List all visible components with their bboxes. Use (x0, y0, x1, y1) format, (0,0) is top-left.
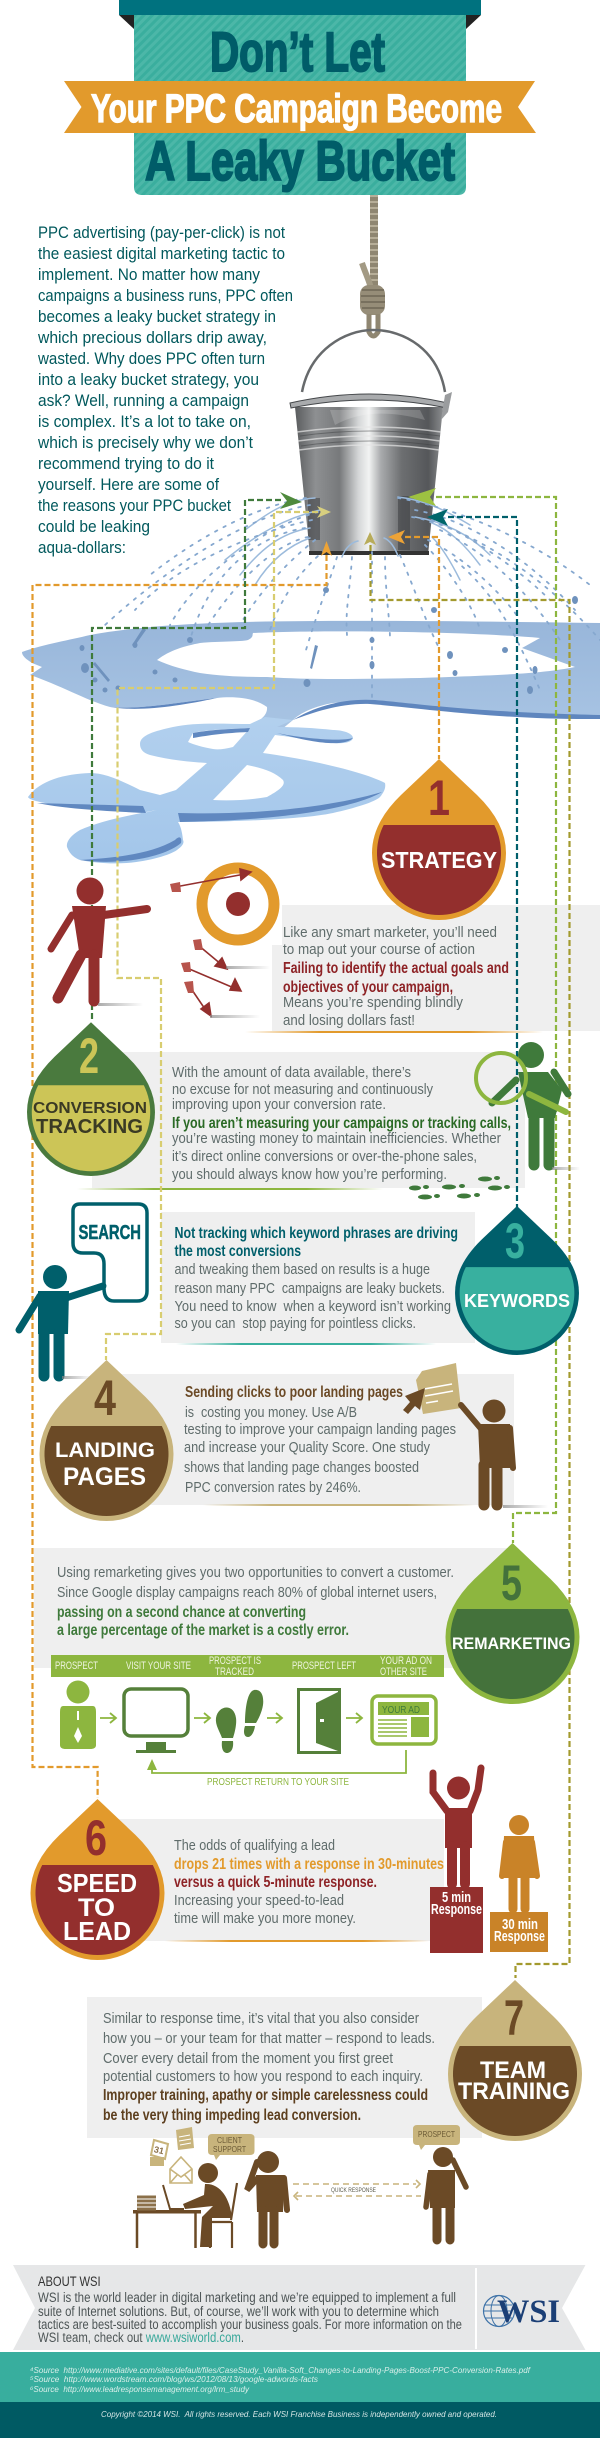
about WSI banner: ABOUT WSI (38, 2273, 101, 2289)
WSI logo: WSI (497, 2294, 560, 2330)
panel 6 text: speed to lead: drops 21 times with a response in 30-minutes (174, 1856, 444, 1873)
panel 4 text: landing pages: Sending clicks to poor landing pages (185, 1384, 403, 1401)
panel 1 text: strategy: Means you’re spending blindly (283, 995, 464, 1011)
drop 4: landing pages: PAGES (63, 1463, 146, 1491)
prospect on phone: PROSPECT (418, 2129, 455, 2139)
remarketing flow icons: PROSPECT RETURN TO YOUR SITE (207, 1777, 349, 1788)
panel 1 text: strategy: to map out your course of action (283, 942, 475, 958)
drop 2: conversion tracking (27, 1022, 155, 1176)
puddle with dollar sign (22, 621, 600, 863)
remarketing step band: VISIT YOUR SITE (126, 1660, 191, 1672)
panel 4 text: landing pages: testing to improve your campaign landing pages (184, 1422, 456, 1438)
panel 2 text: conversion tracking: no excuse for not measuring and continuously (172, 1082, 434, 1098)
drop 3: keywords: 3 (505, 1213, 525, 1269)
title banner (64, 0, 536, 195)
about WSI banner: tactics are best-suited to accomplish your business goals. For more information on the (38, 2317, 462, 2332)
drop 2: conversion tracking: 2 (79, 1028, 99, 1084)
panel 7 text: team training: how you – or your team for that matter – respond to leads. (103, 2031, 435, 2047)
drop 7: team training: 7 (504, 1990, 524, 2046)
panel 7 text: team training (103, 2011, 435, 2124)
quick response arrows (293, 2180, 421, 2200)
sources footer (0, 2352, 600, 2402)
panel 1 text: strategy: Failing to identify the actual goals and (283, 960, 509, 977)
panel 1 text: strategy (283, 925, 509, 1029)
panel 5 text: remarketing: Using remarketing gives you two opportunities to convert a customer. (57, 1565, 454, 1581)
drop 6: speed to lead: SPEED (57, 1868, 137, 1898)
icon: podium figures 5 min and 30 min: Response (431, 1901, 482, 1918)
leak arrowheads (280, 488, 448, 556)
panel 2 text: conversion tracking: If you aren’t measuring your campaigns or tracking calls, (172, 1115, 511, 1132)
copyright footer: Copyright ©2014 WSI. All rights reserved. Each WSI Franchise Business is independently owned and operated. (101, 2409, 497, 2419)
panel 4 text: landing pages: PPC conversion rates by 246%. (185, 1480, 361, 1496)
drop 2: conversion tracking: TRACKING (36, 1116, 143, 1138)
panel 5 text: remarketing (57, 1565, 454, 1639)
panel 1 text: strategy: objectives of your campaign, (283, 979, 453, 996)
panel 7 text: team training: Improper training, apathy or simple carelessness could (103, 2087, 428, 2104)
about WSI banner: suite of Internet solutions. But, of course, we’ll work with you to determine which (38, 2304, 439, 2319)
client support illustration: 31 (153, 2144, 165, 2156)
sources footer: ⁵Source http://www.wordstream.com/blog/ws/2012/08/13/google-adwords-facts (30, 2375, 318, 2384)
remarketing step band (51, 1655, 444, 1678)
drop 1: strategy: STRATEGY (381, 847, 497, 873)
intro paragraph: which precious dollars drip away, (37, 328, 267, 347)
drop 6: speed to lead (30, 1799, 164, 1960)
remarketing step band: TRACKED (215, 1666, 254, 1678)
drop 7: team training: TEAM (480, 2057, 546, 2084)
remarketing step band: PROSPECT (55, 1660, 98, 1672)
drop 1: strategy (372, 759, 506, 920)
remarketing flow icons: YOUR AD (382, 1705, 420, 1716)
quick response arrows: QUICK RESPONSE (331, 2188, 376, 2194)
panel 4 text: landing pages: shows that landing page changes boosted (184, 1460, 419, 1476)
drop 5: remarketing (446, 1543, 580, 1704)
panel 2 text: conversion tracking: With the amount of data available, there’s (172, 1065, 411, 1081)
panel 4 text: landing pages: is costing you money. Use A/B (185, 1405, 357, 1421)
about WSI banner: WSI is the world leader in digital marketing and we’re equipped to implement a full (38, 2290, 456, 2305)
drop 4: landing pages (40, 1360, 174, 1521)
drop 4: landing pages: LANDING (55, 1439, 155, 1462)
panel 2 text: conversion tracking: you should always know how you’re performing. (172, 1167, 447, 1183)
intro paragraph: the reasons your PPC bucket (38, 496, 231, 515)
icon: figure holding document with cursor (403, 1363, 548, 1508)
drop 6: speed to lead: 6 (85, 1810, 107, 1866)
dashed connector lines (32, 497, 570, 1978)
sources footer: ⁴Source http://www.mediative.com/sites/default/files/CaseStudy_Vanilla-Soft_Changes-to-Landing-Pages-Boost-PPC-Conversion-Rates.pdf (30, 2366, 531, 2375)
panel 5 text: remarketing: a large percentage of the market is a costly error. (57, 1622, 349, 1639)
panel 2 text: conversion tracking (172, 1065, 511, 1183)
client support illustration: SUPPORT (213, 2144, 246, 2154)
panel 6 text: speed to lead: time will make you more money. (174, 1911, 356, 1927)
drop 5: remarketing: REMARKETING (452, 1634, 571, 1653)
about WSI banner: WSI team, check out www.wsiworld.com. (38, 2330, 244, 2345)
prospect on phone (413, 2125, 466, 2240)
intro paragraph: the easiest digital marketing tactic to (38, 244, 285, 263)
panel 6 text: speed to lead (174, 1838, 444, 1927)
drop 2: conversion tracking: CONVERSION (33, 1100, 147, 1117)
panel 3 text: keywords: reason many PPC campaigns are leaky buckets. (174, 1281, 445, 1297)
panel 1 text: strategy: and losing dollars fast! (283, 1013, 415, 1029)
intro paragraph: could be leaking (38, 517, 150, 536)
intro paragraph: aqua-dollars: (38, 538, 126, 557)
drop 5: remarketing: 5 (501, 1555, 522, 1611)
panel 7 text: team training: potential customers to how you respond to each inquiry. (103, 2069, 423, 2085)
icon: red archer figure (51, 878, 147, 1006)
intro paragraph: PPC advertising (pay-per-click) is not (38, 223, 285, 242)
title banner: A Leaky Bucket (145, 129, 455, 192)
panel 3 text: keywords (174, 1225, 458, 1332)
intro paragraph: becomes a leaky bucket strategy in (38, 307, 276, 326)
panel accent lines (77, 1031, 543, 1942)
panel 2 text: conversion tracking: improving upon your conversion rate. (172, 1097, 386, 1113)
panel 5 text: remarketing: Since Google display campaigns reach 80% of global internet users, (57, 1585, 437, 1601)
drop 3: keywords: KEYWORDS (464, 1291, 570, 1311)
intro paragraph: campaigns a business runs, PPC often (38, 286, 293, 305)
drop 7: team training: TRAINING (458, 2078, 570, 2105)
copyright footer (0, 2402, 600, 2438)
intro paragraph: wasted. Why does PPC often turn (37, 349, 265, 368)
about WSI banner (13, 2265, 586, 2350)
panel 6 text: speed to lead: versus a quick 5-minute response. (174, 1874, 377, 1891)
remarketing step band: YOUR AD ON (380, 1655, 432, 1667)
panel 4 text: landing pages (184, 1384, 456, 1496)
panel 1 text: strategy: Like any smart marketer, you’ll need (283, 925, 497, 941)
icon: target with arrows (170, 868, 274, 1018)
drop 6: speed to lead: TO (78, 1894, 115, 1922)
panel 5 text: remarketing: passing on a second chance at converting (57, 1604, 306, 1621)
panel 3 text: keywords: and tweaking them based on results is a huge (174, 1262, 430, 1278)
water splashes (80, 497, 600, 700)
intro paragraph (37, 223, 293, 557)
remarketing step band: PROSPECT IS (209, 1655, 261, 1667)
icon: figure with search sign: SEARCH (78, 1222, 141, 1244)
drop 3: keywords (455, 1206, 579, 1355)
sources footer: ⁶Source http://www.leadresponsemanagement.org/lrm_study (30, 2385, 250, 2394)
icon: podium figures 5 min and 30 min: 30 min (502, 1916, 538, 1933)
panel 4 text: landing pages: and increase your Quality Score. One study (184, 1440, 431, 1456)
drop 7: team training (448, 1980, 582, 2141)
panel 3 text: keywords: the most conversions (174, 1243, 301, 1260)
icon: figure with magnifier and footprints (409, 1042, 580, 1200)
metal bucket (290, 330, 452, 555)
intro paragraph: ask? Well, running a campaign (38, 391, 249, 410)
intro paragraph: which is precisely why we don’t (37, 433, 253, 452)
panel 3 text: keywords: so you can stop paying for pointless clicks. (174, 1316, 416, 1332)
remarketing flow icons (60, 1680, 436, 1788)
intro paragraph: recommend trying to do it (38, 454, 214, 473)
panel 6 text: speed to lead: The odds of qualifying a lead (174, 1838, 335, 1854)
panel 7 text: team training: be the very thing impeding lead conversion. (103, 2107, 361, 2124)
panel 7 text: team training: Similar to response time, it’s vital that you also consider (103, 2011, 419, 2027)
panel 2 text: conversion tracking: it’s direct online conversions or over-the-phone sales, (172, 1149, 477, 1165)
panel 7 text: team training: Cover every detail from the moment you first greet (103, 2051, 393, 2067)
icon: podium figures 5 min and 30 min: 5 min (442, 1889, 471, 1906)
intro paragraph: yourself. Here are some of (38, 475, 219, 494)
grey text panels (34, 905, 600, 2138)
title banner: Don’t Let (210, 20, 385, 83)
drop 6: speed to lead: LEAD (63, 1916, 131, 1946)
drop 1: strategy: 1 (428, 770, 450, 826)
rope and noose (360, 195, 385, 336)
panel 3 text: keywords: Not tracking which keyword phrases are driving (174, 1225, 458, 1242)
icon: podium figures 5 min and 30 min: Response (494, 1928, 545, 1945)
intro paragraph: implement. No matter how many (38, 265, 260, 284)
drop 4: landing pages: 4 (94, 1370, 116, 1426)
client support illustration: CLIENT (217, 2135, 242, 2145)
remarketing step band: OTHER SITE (380, 1666, 427, 1678)
client support illustration (133, 2127, 287, 2248)
icon: podium figures 5 min and 30 min (430, 1768, 548, 1953)
remarketing step band: PROSPECT LEFT (292, 1660, 356, 1672)
panel 2 text: conversion tracking: you’re wasting money to maintain inefficiencies. Whether (172, 1131, 501, 1147)
panel 6 text: speed to lead: Increasing your speed-to-lead (174, 1893, 344, 1909)
intro paragraph: is complex. It’s a lot to take on, (38, 412, 251, 431)
icon: figure with search sign (19, 1204, 147, 1379)
intro paragraph: into a leaky bucket strategy, you (38, 370, 259, 389)
panel 3 text: keywords: You need to know when a keyword isn’t working (174, 1299, 451, 1315)
